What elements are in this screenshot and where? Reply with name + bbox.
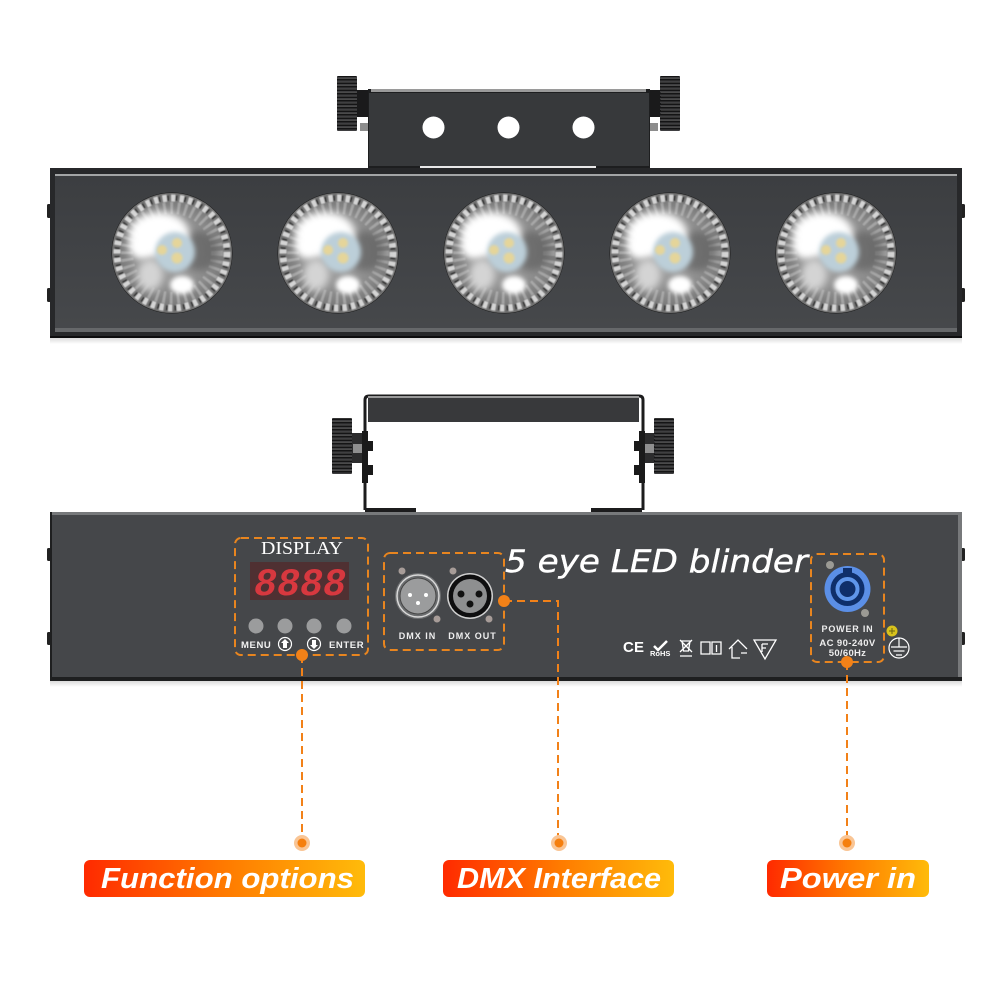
menu buttons bbox=[248, 618, 352, 634]
power callout frame bbox=[811, 554, 884, 662]
lamp 3 bbox=[444, 192, 564, 314]
lamp 1 bbox=[112, 192, 232, 314]
product name script: 5 eye LED blinder bbox=[505, 544, 810, 580]
ground symbol bbox=[889, 638, 909, 658]
lamp 2 bbox=[278, 192, 398, 314]
rear fixture: hanging bracket bbox=[332, 396, 674, 513]
lamp 4 bbox=[610, 192, 730, 314]
callout frames and connectors bbox=[235, 538, 884, 662]
label: Function options: Function options bbox=[101, 863, 354, 895]
top fixture: front panel with five lamps bbox=[47, 168, 965, 344]
manual icon bbox=[701, 642, 721, 654]
DMX IN connector bbox=[395, 568, 441, 622]
rear fixture: back panel bbox=[47, 512, 965, 687]
label: DMX Interface: DMX Interface bbox=[457, 863, 661, 895]
voltage label: AC 90-240V bbox=[819, 638, 876, 649]
DMX section bbox=[395, 568, 497, 641]
connector: DMX interface bbox=[498, 595, 567, 851]
right adjustment knob bbox=[649, 76, 680, 131]
up arrow icon bbox=[278, 638, 292, 650]
DMX IN label: DMX IN bbox=[399, 631, 436, 641]
DMX OUT label: DMX OUT bbox=[448, 631, 497, 641]
certification icons bbox=[623, 639, 776, 659]
connector: power in bbox=[839, 656, 855, 851]
label: Power in: Power in bbox=[780, 863, 916, 895]
RoHS mark: RoHS bbox=[650, 649, 670, 658]
ENTER label: ENTER bbox=[329, 640, 364, 651]
DMX OUT connector bbox=[447, 568, 493, 622]
RoHS mark bbox=[650, 641, 670, 658]
DMX callout frame bbox=[384, 553, 504, 650]
display callout frame bbox=[235, 538, 368, 655]
DISPLAY heading: DISPLAY bbox=[261, 538, 343, 558]
F triangle mark bbox=[754, 640, 776, 659]
lamp 5 bbox=[776, 192, 896, 314]
CE mark: CE bbox=[623, 639, 644, 656]
connector: function options bbox=[294, 649, 310, 851]
label: Power in bbox=[767, 860, 929, 897]
yellow ground screw bbox=[886, 626, 898, 636]
power section bbox=[819, 561, 909, 659]
right adjustment knob bbox=[645, 418, 674, 474]
LED display: 8888 bbox=[254, 563, 346, 607]
left adjustment knob bbox=[332, 418, 362, 474]
control section: display and buttons bbox=[241, 538, 364, 651]
MENU label: MENU bbox=[241, 640, 271, 651]
left adjustment knob bbox=[337, 76, 369, 131]
POWER IN label: POWER IN bbox=[822, 624, 873, 634]
power connector bbox=[824, 561, 870, 617]
bracket plate with three holes bbox=[368, 89, 650, 169]
bracket frame bbox=[362, 396, 645, 513]
indoor use icon bbox=[729, 640, 747, 658]
frequency label: 50/60Hz bbox=[829, 648, 866, 659]
WEEE bin bbox=[680, 640, 692, 656]
down arrow icon bbox=[308, 638, 320, 650]
top fixture: mounting bracket bbox=[337, 76, 680, 169]
